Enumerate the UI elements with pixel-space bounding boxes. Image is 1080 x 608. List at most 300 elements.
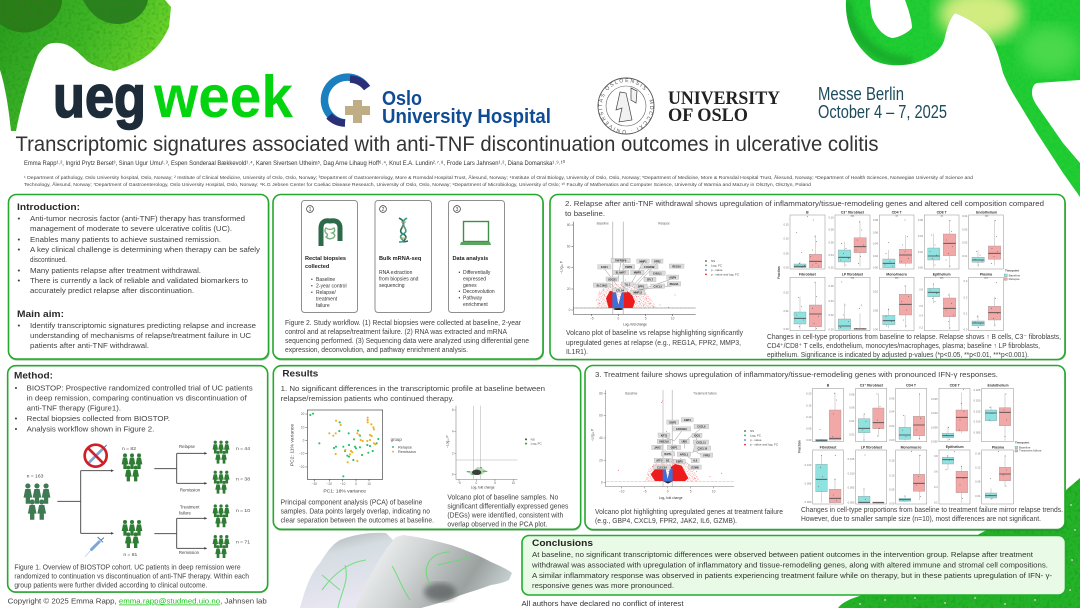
legend: timepoint — [1004, 268, 1020, 281]
legend: volcano baseline: Log₂ FC — [531, 442, 542, 446]
caption: figure 1 — [14, 565, 249, 590]
chart: volcano treatment failure: Log₂ fold change — [659, 496, 683, 500]
chart: PCA plot: 0 — [355, 482, 357, 486]
panel: results — [273, 366, 581, 531]
heading: result 2: to baseline. — [565, 209, 605, 218]
chart: volcano treatment failure: 80 — [599, 392, 603, 396]
chart: volcano treatment failure: UBD — [682, 441, 687, 444]
text: method bullets: in deep remission, comparing continuation vs discontinuation of — [27, 393, 248, 402]
boxplot: C3 fibroblast: 0.02 — [849, 433, 855, 437]
legend: volcano categories: NS — [750, 429, 754, 433]
boxplot: Fibroblast — [805, 446, 843, 504]
boxplot: Epithelium: 0.2 — [919, 325, 924, 329]
boxplot: Epithelium: Epithelium — [933, 272, 951, 276]
chart: volcano plot baseline vs relapse: 10 — [671, 317, 675, 321]
logo: University of Oslo: UNIVERSITY — [668, 88, 780, 109]
boxplot: Endothelium — [962, 211, 1003, 269]
chart: PCA plot — [290, 410, 416, 494]
boxplot: Epithelium: 0.4 — [919, 313, 924, 317]
card: rectal biopsies: collected — [305, 264, 330, 270]
card: data analysis: expressed — [463, 276, 486, 282]
heading: result 2 — [565, 199, 1044, 218]
chart: volcano treatment failure: 10 — [712, 489, 716, 493]
boxplot: B: 0.20 — [806, 391, 812, 395]
boxplot: C3 fibroblast: 0.10 — [828, 215, 834, 219]
text: introduction bullets: Anti-tumor necrosis factor (anti-TNF) therapy has transformed — [30, 214, 245, 223]
legend: volcano categories: p - value — [750, 438, 762, 442]
chart: BIOSTOP cohort flow: failure — [179, 510, 191, 515]
boxplot: Monocyte/macro: 0.10 — [889, 473, 895, 477]
icon: no syringe — [85, 445, 107, 467]
chart: cell-type proportions baseline vs relapse: *** — [895, 276, 899, 280]
chart: PCA plot: −30 — [312, 482, 317, 486]
chart: volcano plot baseline vs relapse: REG1A — [672, 265, 681, 268]
chart: volcano plot baseline vs relapse: FPR2 — [654, 260, 661, 263]
card: data analysis: Data analysis — [452, 256, 488, 262]
chart: volcano treatment failure: FAM111C — [676, 428, 687, 431]
chart: volcano plot baseline vs relapse: SPP1 — [638, 285, 645, 288]
caption: figure 2: expression, deconvolution, and pathway enrichment analysis. — [285, 347, 468, 354]
chart: volcano treatment failure: 5 — [690, 489, 692, 493]
chart: cell-type proportions baseline vs relapse — [777, 211, 1020, 331]
boxplot: C3 fibroblast: 0.06 — [828, 240, 834, 244]
heading: result 1: relapse/remission patients who continued therapy. — [281, 394, 454, 403]
legend: timepoint: Timepoint — [1005, 268, 1019, 272]
boxplot: Epithelium: 0.6 — [919, 304, 924, 308]
boxplot: CD4 T: 0.02 — [889, 424, 895, 428]
chart: PCA plot: 20 — [301, 412, 305, 416]
chart: PCA plot: PC1: 18% variance — [323, 488, 366, 494]
boxplot: CD4 T: 0.04 — [873, 241, 879, 245]
boxplot: Fibroblast: 0.000 — [805, 500, 812, 504]
chart: volcano treatment failure: 0 — [601, 480, 603, 484]
chart: PCA plot: 0 — [303, 439, 305, 443]
affiliations: Technology, Ålesund, Norway; ⁷Department of Gastroenterology, Oslo University Hospital, Oslo, Norway; ⁸K.G Jebsen Center for Coeliac Disease Research, University of Oslo, Oslo, Norway; ⁹Department of Microbiology, University of Oslo; ¹⁰ Faculty of Mathematics and Computer Science, University of Warmia and Mazury in Olsztyn, Olsztyn, Poland — [24, 181, 811, 187]
chart: cell-type proportions treatment failure — [798, 384, 1042, 505]
card: rectal biopsies: treatment — [316, 296, 338, 302]
chart: cell-type proportions baseline vs relapse: ** — [941, 214, 944, 218]
caption: volcano baseline: Volcano plot of baseline samples. No — [447, 495, 558, 502]
boxplot: Plasma — [975, 446, 1013, 504]
card: bulk mRNA-seq: Bulk mRNA-seq — [379, 256, 422, 262]
boxplot: LP fibroblast: 0.00 — [828, 327, 834, 331]
decoration: green organic shape top left — [0, 0, 171, 131]
text: conclusions body — [531, 552, 1053, 590]
boxplot: LP fibroblast: 0.010 — [848, 471, 855, 475]
boxplot: Plasma: 0.2 — [964, 295, 968, 299]
icons: patient groups — [24, 441, 229, 558]
boxplot: LP fibroblast: 0.06 — [828, 284, 834, 288]
chart: volcano plot baseline vs relapse: Relapse — [658, 221, 670, 225]
text: main aim bullet: understanding of mechanisms of relapse/treatment failure in UC — [30, 331, 251, 340]
chart: cell-type proportions baseline vs relapse: *** — [985, 214, 989, 218]
icon: colon — [321, 221, 340, 246]
legend: volcano categories: Log₂ FC — [711, 263, 723, 267]
panel: relapse after anti-TNF withdrawal — [550, 194, 1066, 360]
chart: BIOSTOP cohort flow: n = 81 — [123, 552, 138, 558]
caption: volcano baseline: overlap observed in the PCA plot. — [447, 521, 547, 528]
card: bulk mRNA-seq: RNA extraction — [379, 270, 413, 276]
venue and date: October 4 – 7, 2025 — [818, 102, 947, 122]
chart: volcano plot baseline vs relapse: MMP1 — [639, 260, 647, 263]
chart: cell-type proportions baseline vs relapse: Fraction — [777, 266, 781, 279]
chart: volcano treatment failure: GZMB — [691, 466, 699, 469]
chart: volcano treatment failure: GBP2 — [669, 421, 677, 424]
chart: volcano treatment failure: UBE2L6 — [659, 441, 669, 444]
boxplot: CD4 T — [889, 384, 927, 442]
boxplot: C3 fibroblast: 0.08 — [828, 227, 834, 231]
chart: PCA plot: −20 — [299, 465, 305, 469]
caption: volcano treatment failure: (e.g., GBP4, CXCL9, FPR2, JAK2, IL6, GZMB). — [595, 518, 737, 525]
legend: PCA groups: Remission — [398, 450, 416, 454]
boxplot: B: 0.05 — [783, 251, 789, 255]
chart: volcano treatment failure: KRT1 — [661, 434, 668, 437]
boxplot: Epithelium — [919, 272, 959, 331]
logo: Oslo University Hospital: Oslo — [382, 88, 422, 110]
caption: figure 2: sequencing performed. (3) Sequencing data were analyzed using differential gene — [285, 338, 529, 345]
boxplot: Endothelium: 0.03 — [962, 227, 968, 231]
caption: volcano relapse: upregulated genes at relapse (e.g., REG1A, FPR2, MMP3, — [566, 340, 741, 347]
chart: BIOSTOP cohort flow: n = 71 — [236, 540, 250, 546]
text: method bullets: BIOSTOP: Prospective randomized controlled trial of UC patients — [27, 383, 253, 392]
chart: PCA plot: −10 — [340, 482, 346, 486]
text: conclusions body: A similar inflammatory response was observed in patients experiencing treatment failure while on therapy, but in these patients upregulation of IFN- γ- — [532, 573, 1053, 580]
card: bulk mRNA-seq — [375, 200, 432, 312]
boxplot: Fibroblast: 0.010 — [805, 463, 812, 467]
chart: volcano baseline samples: 0 — [452, 473, 454, 477]
boxplot: C3 fibroblast: 0.02 — [828, 265, 834, 269]
chart: volcano baseline samples: 5 — [494, 481, 496, 485]
boxplot: Fibroblast: Fibroblast — [820, 446, 837, 450]
boxplot: LP fibroblast: LP fibroblast — [842, 272, 864, 276]
card: data analysis: genes — [463, 283, 477, 289]
chart: volcano plot baseline vs relapse: 0 — [569, 308, 571, 312]
caption: figure 2: control and at relapse/treatment failure. (2) RNA was extracted and mRNA — [285, 329, 507, 336]
chart: volcano plot baseline vs relapse: AQP9 — [669, 276, 677, 279]
chart: volcano plot baseline vs relapse: SOCS1 — [608, 278, 617, 281]
caption: PCA: Principal component analysis (PCA) of baseline — [281, 500, 422, 507]
card: data analysis: 3 — [456, 207, 459, 213]
logo: University of Oslo: OF OSLO — [668, 105, 748, 126]
chart: BIOSTOP cohort flow: Remission — [180, 487, 201, 492]
chart: volcano plot baseline vs relapse: REG3A — [670, 283, 679, 286]
text: main aim bullet — [18, 321, 256, 350]
boxplot: B — [806, 384, 843, 442]
boxplot: CD8 T: 0.005 — [931, 425, 938, 429]
chart: volcano plot baseline vs relapse: MMP12 — [633, 292, 643, 295]
boxplot: LP fibroblast — [848, 446, 887, 504]
chart: PCA plot: −20 — [327, 482, 332, 486]
boxplot: Fibroblast: 0.02 — [783, 291, 789, 295]
text: introduction bullets: Enables many patients to achieve sustained remission. — [30, 235, 221, 244]
chart: volcano plot baseline vs relapse: Log₂ fold change — [623, 323, 647, 327]
card: data analysis: • — [458, 296, 460, 302]
chart: volcano plot baseline vs relapse: SLAMF7 — [616, 272, 626, 275]
heading: result 1 — [281, 384, 545, 403]
caption: volcano baseline — [447, 495, 569, 528]
boxplot: Endothelium: 0.010 — [974, 420, 981, 424]
chart: volcano plot baseline vs relapse: CTLA4 — [616, 289, 625, 292]
card: rectal biopsies: Relapse/ — [316, 290, 336, 296]
text: introduction bullets — [18, 214, 260, 295]
boxplot: B: B — [806, 211, 809, 215]
text: method bullets: anti-TNF therapy (Figure1). — [27, 404, 121, 413]
chart: volcano baseline samples: 4 — [452, 430, 454, 434]
boxplot: Fibroblast: 0.005 — [805, 481, 812, 485]
chart: volcano plot baseline vs relapse: IL1R1 — [601, 266, 608, 269]
chart: volcano treatment failure: IFI27L — [664, 453, 672, 456]
chart: volcano plot baseline vs relapse: 40 — [567, 266, 571, 270]
chart: volcano treatment failure: Treatment failure — [693, 391, 717, 395]
card: data analysis: Deconvolution — [463, 289, 495, 295]
boxplot: CD4 T: CD4 T — [906, 384, 917, 388]
card: data analysis: • — [458, 270, 460, 276]
decoration: green organic shape top right — [840, 0, 1080, 200]
boxplot: CD8 T: CD8 T — [950, 384, 961, 388]
conflict of interest statement: All authors have declared no conflict of interest — [522, 601, 684, 608]
chart: volcano treatment failure: Baseline — [625, 391, 638, 395]
boxplot: Epithelium: 0.6 — [934, 469, 938, 473]
boxplot: Monocyte/macro: 0.05 — [873, 309, 879, 313]
boxplot: LP fibroblast: 0.000 — [848, 500, 855, 504]
text: method bullets: Rectal biopsies collected from BIOSTOP. — [27, 414, 170, 423]
card: rectal biopsies: • — [311, 284, 313, 290]
chart: cell-type proportions baseline vs relapse: *** — [984, 276, 989, 280]
card: data analysis — [448, 200, 504, 312]
boxplot: B: 0.15 — [783, 222, 789, 226]
chart: volcano plot baseline vs relapse: 60 — [567, 244, 571, 248]
card: rectal biopsies: failure — [316, 303, 330, 309]
caption: figure 2: Figure 2. Study workflow. (1) Rectal biopsies were collected at baseline, 2-year — [285, 320, 522, 327]
chart: volcano baseline samples: 2 — [452, 451, 454, 455]
boxplot: Fibroblast: 0.00 — [783, 327, 789, 331]
chart: BIOSTOP cohort flow: n = 82 — [122, 446, 136, 452]
chart: BIOSTOP cohort flow: Remission — [179, 550, 200, 555]
caption: volcano relapse: IL1R1). — [566, 349, 588, 356]
boxplot: Epithelium: 0.4 — [934, 485, 938, 489]
chart: PCA plot: PC2: 11% variance — [290, 424, 296, 466]
text: introduction bullets: There is currently a lack of reliable and validated biomarkers to — [30, 276, 248, 285]
chart: volcano treatment failure: IDO1 — [694, 435, 701, 438]
card: rectal biopsies: Baseline — [316, 277, 335, 283]
boxplot: Plasma: 0.04 — [975, 494, 981, 498]
panel: method — [8, 366, 268, 593]
boxplot: CD8 T: 0.00 — [918, 266, 924, 270]
legend: volcano categories: p - value and log₂ FC — [711, 272, 740, 276]
card: data analysis: enrichment — [463, 302, 488, 308]
card: bulk mRNA-seq: sequencing — [379, 283, 405, 289]
caption: cell-type proportions relapse — [767, 334, 1061, 359]
chart: PCA plot: 10 — [301, 426, 305, 430]
illustration: liver — [300, 533, 512, 608]
boxplot: CD8 T — [918, 211, 959, 270]
chart: volcano plot baseline vs relapse: Baseline — [597, 221, 609, 225]
chart: volcano plot baseline vs relapse: FCGR3B — [644, 266, 655, 269]
chart: volcano plot baseline vs relapse: SLC16A1 — [596, 284, 608, 287]
chart: BIOSTOP cohort flow: n = 10 — [236, 508, 250, 514]
boxplot: Endothelium: 0.015 — [974, 409, 981, 413]
boxplot: Plasma: Plasma — [980, 272, 992, 276]
heading: result 1: 1. No significant differences in the transcriptomic profile at baseline between — [281, 384, 545, 393]
boxplot: CD8 T: 0.000 — [931, 440, 938, 444]
boxplot: CD8 T: 0.06 — [918, 218, 924, 222]
heading: results: Results — [282, 369, 318, 379]
boxplot: CD4 T: 0.08 — [873, 218, 879, 222]
chart: BIOSTOP cohort flow: n = 163 — [27, 474, 44, 480]
venue and date — [818, 84, 947, 122]
chart: cell-type proportions baseline vs relapse: *** — [851, 214, 855, 218]
caption: volcano relapse — [566, 330, 743, 356]
caption: cell-type proportions treatment failure — [801, 507, 1063, 523]
boxplot: CD8 T: 0.010 — [931, 411, 938, 415]
boxplot: C3 fibroblast — [849, 384, 887, 442]
boxplot: Monocyte/macro: 0.05 — [889, 487, 895, 491]
chart: volcano treatment failure: 40 — [599, 436, 603, 440]
legend: timepoint — [1015, 441, 1042, 453]
boxplot: C3 fibroblast — [828, 211, 870, 269]
caption: figure 2 — [285, 320, 529, 354]
card: rectal biopsies: • — [311, 277, 313, 283]
text: main aim bullet: patients after anti-TNF withdrawal. — [30, 341, 149, 350]
caption: volcano treatment failure: Volcano plot highlighting upregulated genes at treatment failure — [595, 509, 783, 516]
text: conclusions body: withdrawal was associated with upregulation of inflammatory and tissue-remodeling genes, along with altered immune and stromal cell compositions. — [531, 562, 1048, 570]
chart: volcano baseline samples: −5 — [457, 481, 461, 485]
chart: volcano treatment failure: APOL1 — [680, 453, 689, 456]
boxplot: Monocyte/macro: Mono/macro — [901, 446, 921, 450]
chart: volcano plot baseline vs relapse: −5 — [590, 317, 594, 321]
chart: volcano baseline samples: 6 — [452, 408, 454, 412]
decoration: green organic shape bottom right — [838, 478, 1080, 608]
boxplot: CD4 T: 0.02 — [873, 254, 879, 258]
boxplot: Epithelium: 0.8 — [934, 454, 938, 458]
card: data analysis: • — [458, 289, 460, 295]
boxplot: C3 fibroblast: 0.04 — [828, 253, 834, 257]
legend: PCA groups: Relapse — [398, 445, 412, 449]
text: introduction bullets: • — [18, 245, 20, 254]
chart: volcano plot baseline vs relapse: TLL1 — [624, 283, 631, 286]
text: main aim bullet: Identify transcriptomic signatures predicting relapse and increase — [30, 321, 256, 330]
chart: volcano baseline samples: −Log₁₀ P — [445, 435, 449, 448]
chart: PCA plot: 10 — [367, 482, 371, 486]
card: rectal biopsies: Rectal biopsies — [305, 256, 346, 262]
boxplot: Plasma: 0.3 — [964, 279, 968, 283]
boxplot: Endothelium: 0.005 — [974, 430, 981, 434]
logo: ueg week: week — [153, 64, 293, 130]
title: Transcriptomic signatures associated with anti-TNF discontinuation outcomes in ulcerative colitis — [16, 133, 878, 156]
text: method bullets: • — [15, 414, 18, 423]
boxplot: CD4 T: CD4 T — [892, 211, 903, 215]
boxplot: Fibroblast — [783, 272, 825, 331]
panel: introduction — [8, 194, 270, 360]
boxplot: CD8 T: 0.02 — [918, 250, 924, 254]
chart: PCA plot: −10 — [299, 452, 305, 456]
logo: Oslo University Hospital: University Hospital — [382, 106, 551, 128]
logo: University of Oslo — [598, 78, 780, 134]
boxplot: B: 0.10 — [806, 415, 812, 419]
chart: volcano plot baseline vs relapse: −Log₁₀ P — [560, 261, 564, 274]
text: conclusions body: At baseline, no significant transcriptomic differences were observed between patient outcomes in the intervention group. Relapse after treatment — [532, 552, 1033, 559]
text: main aim bullet: • — [18, 321, 20, 330]
text: introduction bullets: • — [18, 235, 20, 244]
boxplot: B — [783, 211, 825, 270]
card: bulk mRNA-seq: 2 — [382, 207, 385, 213]
chart: volcano plot baseline vs relapse: MMP3 — [634, 272, 642, 275]
caption: cell-type proportions relapse: Changes in cell-type proportions from baseline to relapse. Relapse shows ↑ B cells, C3⁻ fibroblasts, — [767, 334, 1061, 341]
boxplot: B: 0.00 — [806, 438, 812, 442]
legend: timepoint: Baseline — [1009, 273, 1020, 277]
chart: volcano treatment failure: 60 — [599, 414, 603, 418]
boxplot: CD4 T: 0.06 — [873, 230, 879, 234]
chart: volcano plot baseline vs relapse: PDPN — [625, 266, 632, 269]
chart: volcano treatment failure: B2 — [666, 460, 670, 463]
logo: University of Oslo: UNIVERSITAS OSLOENSIS · MDCCCXI · — [598, 78, 654, 134]
chart: cell-type proportions treatment failure: Fraction — [798, 440, 802, 453]
chart: volcano treatment failure: CXCL9 — [697, 426, 706, 429]
legend: timepoint: Treatment failure — [1019, 449, 1042, 453]
boxplot: B: 0.15 — [806, 404, 812, 408]
boxplot: LP fibroblast: 0.005 — [848, 486, 855, 490]
legend: PCA groups — [391, 437, 416, 454]
legend: volcano categories: NS — [711, 259, 715, 263]
caption: cell-type proportions treatment failure: However, due to smaller sample size (n=10), most differences are not significant. — [801, 516, 1041, 523]
boxplot: C3 fibroblast: C3⁺ fibroblast — [860, 384, 884, 388]
chart: volcano plot baseline vs relapse: CHI3L1 — [653, 272, 662, 275]
boxplot: Plasma: 0.12 — [975, 465, 981, 469]
boxplot: Endothelium: 0.020 — [974, 398, 981, 402]
boxplot: LP fibroblast: 0.04 — [828, 299, 834, 303]
boxplot: B: 0.00 — [783, 266, 789, 270]
chart: volcano baseline samples: Log₂ fold change — [471, 486, 495, 490]
chart: volcano treatment failure: −Log₁₀ P — [590, 429, 594, 441]
caption: PCA: samples. Data points largely overlap, indicating no — [281, 509, 430, 516]
chart: volcano treatment failure: 20 — [599, 458, 603, 462]
chart: volcano treatment failure — [590, 390, 779, 500]
legend: timepoint: Timepoint — [1015, 441, 1029, 445]
caption: PCA — [281, 500, 434, 524]
caption: volcano baseline: significant differentially expressed genes — [447, 504, 569, 511]
boxplot: Plasma: 0.1 — [964, 311, 968, 315]
caption: cell-type proportions treatment failure: Changes in cell-type proportions from baseline to treatment failure mirror relapse trends. — [801, 507, 1063, 514]
boxplot: LP fibroblast: 0.015 — [848, 457, 855, 461]
chart: BIOSTOP cohort flow: n = 44 — [236, 446, 250, 452]
boxplot: Endothelium: 0.04 — [962, 214, 968, 218]
text: introduction bullets: • — [18, 276, 20, 285]
boxplot: CD4 T: 0.04 — [889, 410, 895, 414]
boxplot: B: 0.05 — [806, 427, 812, 431]
logo: ueg week — [53, 64, 293, 130]
caption: PCA: clear separation between the outcomes at baseline. — [281, 517, 434, 524]
panel: conclusions — [522, 536, 1066, 595]
boxplot: Plasma — [964, 272, 1003, 331]
heading: main aim: Main aim: — [17, 309, 64, 320]
logo: ueg week: ueg — [53, 64, 146, 130]
heading: introduction: Introduction: — [17, 202, 80, 213]
affiliations — [24, 174, 973, 187]
boxplot: Monocyte/macro: 0.15 — [889, 459, 895, 463]
icon: DNA helix — [399, 218, 408, 242]
boxplot: CD4 T: 0.00 — [873, 266, 879, 270]
boxplot: Monocyte/macro: 0.00 — [889, 501, 895, 505]
text: introduction bullets: accurately predict relapse after discontinuation. — [30, 286, 194, 295]
heading: result 2: 2. Relapse after anti-TNF withdrawal shows upregulation of inflammatory/tissue-remodeling genes and altered cell composition compared — [565, 199, 1044, 208]
caption: figure 1: group patients were further divided according to clinical outcome. — [14, 583, 207, 590]
card: rectal biopsies: • — [311, 290, 313, 296]
caption: volcano relapse: Volcano plot of baseline vs relapse highlighting significantly — [566, 330, 743, 337]
chart: cell-type proportions baseline vs relapse: *** — [940, 276, 944, 280]
text: method bullets — [15, 383, 253, 434]
legend: volcano baseline — [525, 437, 542, 446]
chart: volcano treatment failure: CXCL11 — [696, 441, 706, 444]
